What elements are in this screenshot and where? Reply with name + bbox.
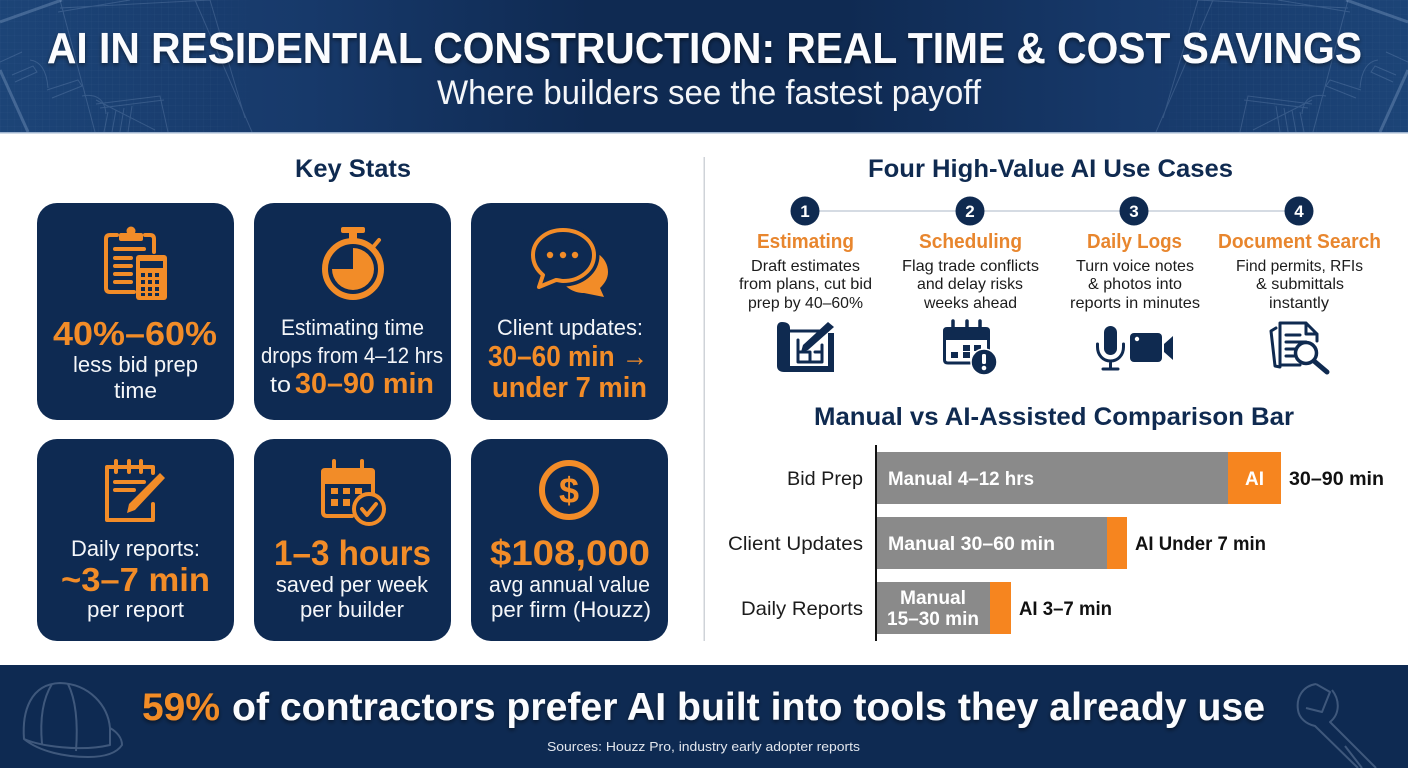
bar row: daily reports — [741, 582, 1112, 634]
stat: 40–60%: 40%–60% — [53, 315, 217, 352]
text: Estimating time — [281, 315, 424, 340]
use case 3: daily logs — [1070, 196, 1200, 369]
step number 3 — [1120, 196, 1148, 226]
caption line 2: time — [114, 378, 157, 403]
stat: 30–60 min: 30–60 min → — [488, 341, 648, 373]
use case 1: estimating — [739, 196, 872, 372]
icon: calendar alert — [943, 321, 997, 375]
stat: 3–7 min: ~3–7 min — [61, 561, 210, 598]
stat card: hours saved — [254, 439, 451, 641]
icon: blueprint and pencil — [777, 322, 834, 372]
label: Scheduling — [919, 231, 1022, 253]
bar row: bid prep — [787, 452, 1384, 504]
bar row: bid prep: Bid Prep — [787, 468, 863, 490]
icon: stopwatch — [325, 227, 381, 297]
step number 2 — [956, 196, 984, 226]
heading: use cases: Four High-Value AI Use Cases — [868, 155, 1233, 183]
label: Document Search — [1218, 231, 1381, 253]
heading: key stats: Key Stats — [295, 155, 411, 183]
description: & photos into — [1088, 276, 1182, 293]
step number 4 — [1284, 196, 1314, 226]
blueprint decoration right — [1156, 0, 1408, 132]
caption: avg annual value — [489, 572, 650, 597]
subtitle: Where builders see the fastest payoff — [437, 74, 982, 112]
stat: $108,000: $108,000 — [490, 534, 650, 573]
label: Estimating — [757, 231, 854, 253]
use case 4: document search — [1218, 196, 1381, 372]
heading: comparison: Manual vs AI-Assisted Comparison Bar — [814, 403, 1294, 431]
stat card: bid prep — [37, 203, 234, 420]
description: reports in minutes — [1070, 295, 1200, 312]
description: from plans, cut bid — [739, 276, 872, 293]
blueprint decoration left — [0, 0, 252, 132]
description: prep by 40–60% — [748, 295, 863, 312]
header banner — [0, 0, 1408, 134]
step number 3: 3 — [1129, 202, 1139, 221]
stat card: estimating time — [254, 203, 451, 420]
description: Flag trade conflicts — [902, 258, 1039, 275]
caption: saved per week — [276, 572, 429, 597]
icon: hard hat outline — [24, 683, 122, 757]
bar row: client updates: Client Updates — [728, 533, 863, 555]
bar chart: manual vs AI — [728, 445, 1384, 641]
description: instantly — [1269, 295, 1329, 312]
description — [1070, 258, 1200, 312]
icon: dollar coin — [542, 463, 596, 517]
icon: wrench outline — [1298, 684, 1376, 768]
description: & submittals — [1256, 276, 1344, 293]
description — [1236, 258, 1363, 312]
bar row: daily reports: AI 3–7 min — [1019, 599, 1112, 620]
description — [902, 258, 1039, 312]
callout: 59%: 59% — [142, 686, 220, 729]
bar row: bid prep: AI — [1245, 469, 1264, 490]
text line 2: drops from 4–12 hrs — [261, 343, 443, 368]
description: Turn voice notes — [1076, 258, 1194, 275]
stat: 1–3 hours: 1–3 hours — [274, 534, 431, 573]
stat card: daily reports — [37, 439, 234, 641]
icon: notepad and pencil — [107, 461, 165, 520]
caption line 2: per firm (Houzz) — [491, 597, 651, 622]
step number 1 — [790, 196, 820, 226]
bar row: client updates: AI Under 7 min — [1135, 534, 1266, 555]
description: Find permits, RFIs — [1236, 258, 1363, 275]
step number 4: 4 — [1294, 202, 1304, 221]
caption: per report — [87, 597, 184, 622]
sources: Sources: Houzz Pro, industry early adopter reports — [547, 739, 861, 754]
bar row: daily reports: Manual — [900, 588, 966, 609]
text line 3: to — [270, 372, 291, 397]
bar row: daily reports: 15–30 min — [887, 609, 979, 630]
icon: clipboard and calculator — [106, 226, 167, 300]
icon: document and magnifier — [1271, 323, 1327, 372]
stat card: annual value — [471, 439, 668, 641]
callout text: of contractors prefer AI built into tools they already use — [232, 686, 1265, 729]
stat: under 7 min: under 7 min — [492, 372, 647, 404]
step number 1: 1 — [800, 202, 810, 221]
bar row: client updates — [728, 517, 1266, 569]
label: Daily Logs — [1087, 231, 1182, 253]
bar row: daily reports: Daily Reports — [741, 598, 863, 620]
text: Client updates: — [497, 315, 643, 340]
icon: calendar with check — [321, 461, 384, 524]
caption: less bid prep — [73, 352, 198, 377]
icon: microphone and camera — [1098, 326, 1173, 369]
icon: dollar coin: $ — [559, 470, 579, 511]
description: weeks ahead — [923, 295, 1017, 312]
bar row: client updates: Manual 30–60 min — [888, 534, 1055, 555]
footer banner — [0, 665, 1408, 768]
description — [739, 258, 872, 312]
bar row: bid prep: 30–90 min — [1289, 469, 1384, 490]
use case 2: scheduling — [902, 196, 1039, 375]
bar row: bid prep: Manual 4–12 hrs — [888, 469, 1034, 490]
description: Draft estimates — [751, 258, 860, 275]
caption line 2: per builder — [300, 597, 404, 622]
description: and delay risks — [917, 276, 1023, 293]
icon: chat bubbles — [533, 230, 608, 297]
stat: 30–90 min: 30–90 min — [295, 368, 434, 400]
step number 2: 2 — [965, 202, 975, 221]
text: Daily reports: — [71, 536, 200, 561]
stat card: client updates — [471, 203, 668, 420]
